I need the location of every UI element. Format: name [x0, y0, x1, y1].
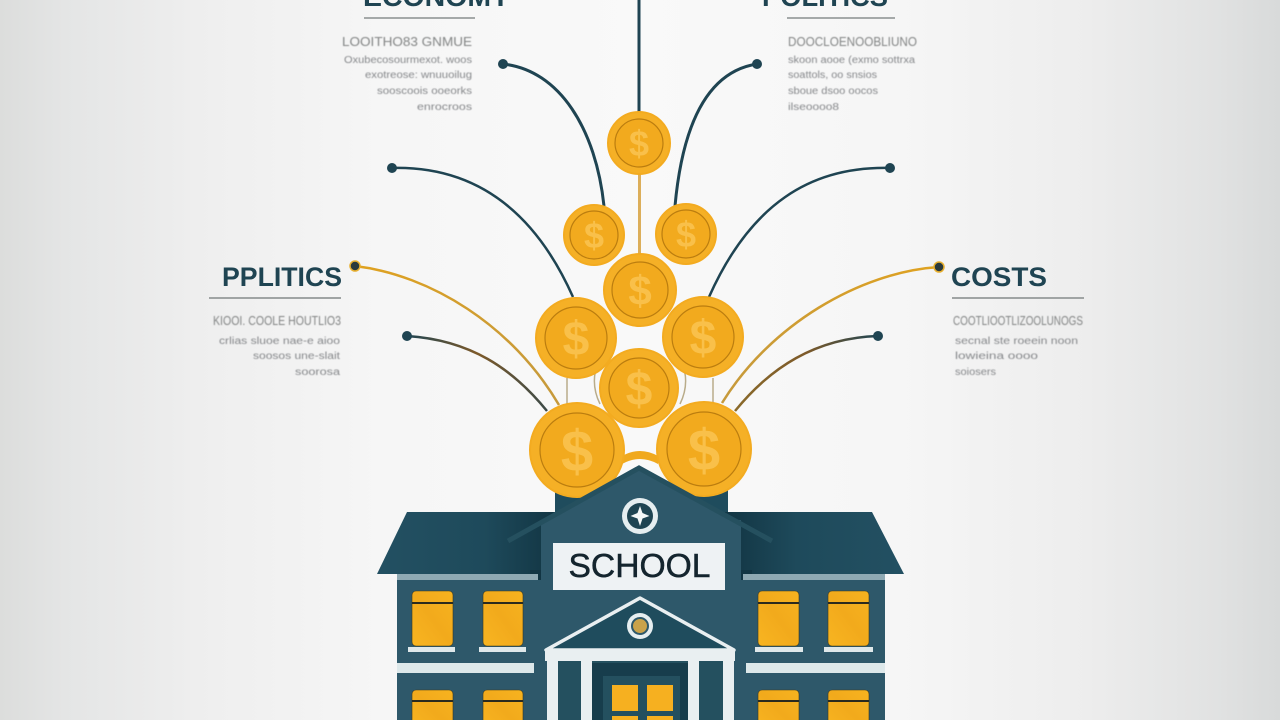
economy body text: sooscoois ooeorks — [377, 86, 472, 97]
coin — [656, 204, 716, 264]
line: brown left curve — [407, 336, 547, 411]
panel: costs — [951, 262, 1084, 378]
heading: pplitics: PPLITICS — [222, 262, 342, 292]
left wing — [377, 512, 556, 720]
heading: costs: COSTS — [951, 262, 1047, 292]
rule — [787, 17, 895, 19]
coin: $ — [563, 313, 590, 366]
lower windows — [412, 690, 869, 720]
pplitics body text: soorosa — [295, 367, 341, 378]
line: upper right curve — [675, 64, 757, 206]
coin: $ — [584, 215, 604, 256]
door recess — [558, 661, 723, 720]
lines: short links between coins — [567, 362, 713, 406]
coin — [604, 254, 676, 326]
economy body text: Oxubecosourmexot. woos — [344, 55, 472, 66]
sign text: SCHOOL — [568, 547, 710, 584]
line: gold left curve — [355, 266, 559, 405]
pplitics body text: crlias sluoe nae-e aioo — [219, 336, 341, 347]
chimney block — [555, 490, 728, 520]
economy body text: exotreose: wnuuoilug — [365, 70, 472, 81]
costs body text — [953, 313, 1083, 378]
rule — [209, 297, 341, 299]
costs body text: lowieina oooo — [955, 351, 1039, 362]
central block — [541, 520, 741, 720]
upper right windows — [755, 591, 873, 652]
coin — [608, 112, 670, 174]
politics body text: sboue dsoo oocos — [788, 86, 878, 97]
connector lines — [355, 0, 939, 411]
economy body text: enrocroos — [417, 102, 472, 113]
coin: $ — [676, 214, 696, 255]
line: upper left curve — [503, 64, 604, 206]
line: brown right curve — [735, 336, 878, 411]
rule — [364, 17, 475, 19]
coin — [564, 205, 624, 265]
columns — [547, 661, 734, 720]
coin: $ — [561, 419, 593, 484]
economy body text — [342, 34, 472, 113]
costs body text: COOTLIOOTLIZOOLUNOGS — [953, 313, 1083, 328]
line: second right curve — [709, 168, 890, 297]
pplitics body text — [213, 313, 341, 378]
panel: economy — [342, 0, 510, 113]
line end dots — [350, 59, 944, 341]
coin — [657, 402, 751, 496]
coin: $ — [629, 123, 649, 164]
school building — [377, 468, 904, 720]
porch emblem — [627, 613, 653, 639]
politics body text: skoon aooe (exmo sottrxa — [788, 55, 915, 66]
politics body text — [788, 34, 917, 113]
coin: $ — [690, 312, 717, 365]
costs body text: secnal ste roeein noon — [955, 336, 1078, 347]
politics body text: DOOCLOENOOBLIUNO — [788, 34, 917, 49]
small band behind coins — [622, 451, 658, 464]
coin — [530, 403, 624, 497]
right wing — [725, 512, 904, 720]
coin: $ — [626, 363, 653, 416]
economy body text: LOOITHO83 GNMUE — [342, 34, 472, 49]
porch pediment — [546, 598, 734, 650]
rule — [952, 297, 1084, 299]
coin: $ — [628, 267, 652, 314]
coin — [663, 297, 743, 377]
panel: politics top right — [762, 0, 917, 113]
coin stack — [530, 112, 751, 497]
panel: pplitics left — [209, 262, 342, 378]
line: second left curve — [392, 168, 573, 297]
pplitics body text: soosos une-slait — [253, 351, 340, 362]
costs body text: soiosers — [955, 367, 996, 378]
entablature — [545, 649, 735, 661]
coin — [536, 298, 616, 378]
line: tan vertical — [638, 174, 641, 256]
emblem: gable clock — [622, 498, 658, 534]
line: top vertical — [638, 0, 640, 113]
sign — [553, 543, 725, 590]
politics body text: ilseoooo8 — [788, 102, 840, 113]
upper left windows — [408, 591, 526, 652]
coin: $ — [688, 418, 720, 483]
politics body text: soattols, oo snsios — [788, 70, 877, 81]
porch — [545, 598, 735, 720]
door windows — [612, 685, 673, 720]
coin — [600, 349, 678, 427]
central gable — [508, 468, 772, 545]
pplitics body text: KIOOI. COOLE HOUTLIO3 — [213, 313, 341, 328]
line: gold right curve — [722, 267, 939, 403]
